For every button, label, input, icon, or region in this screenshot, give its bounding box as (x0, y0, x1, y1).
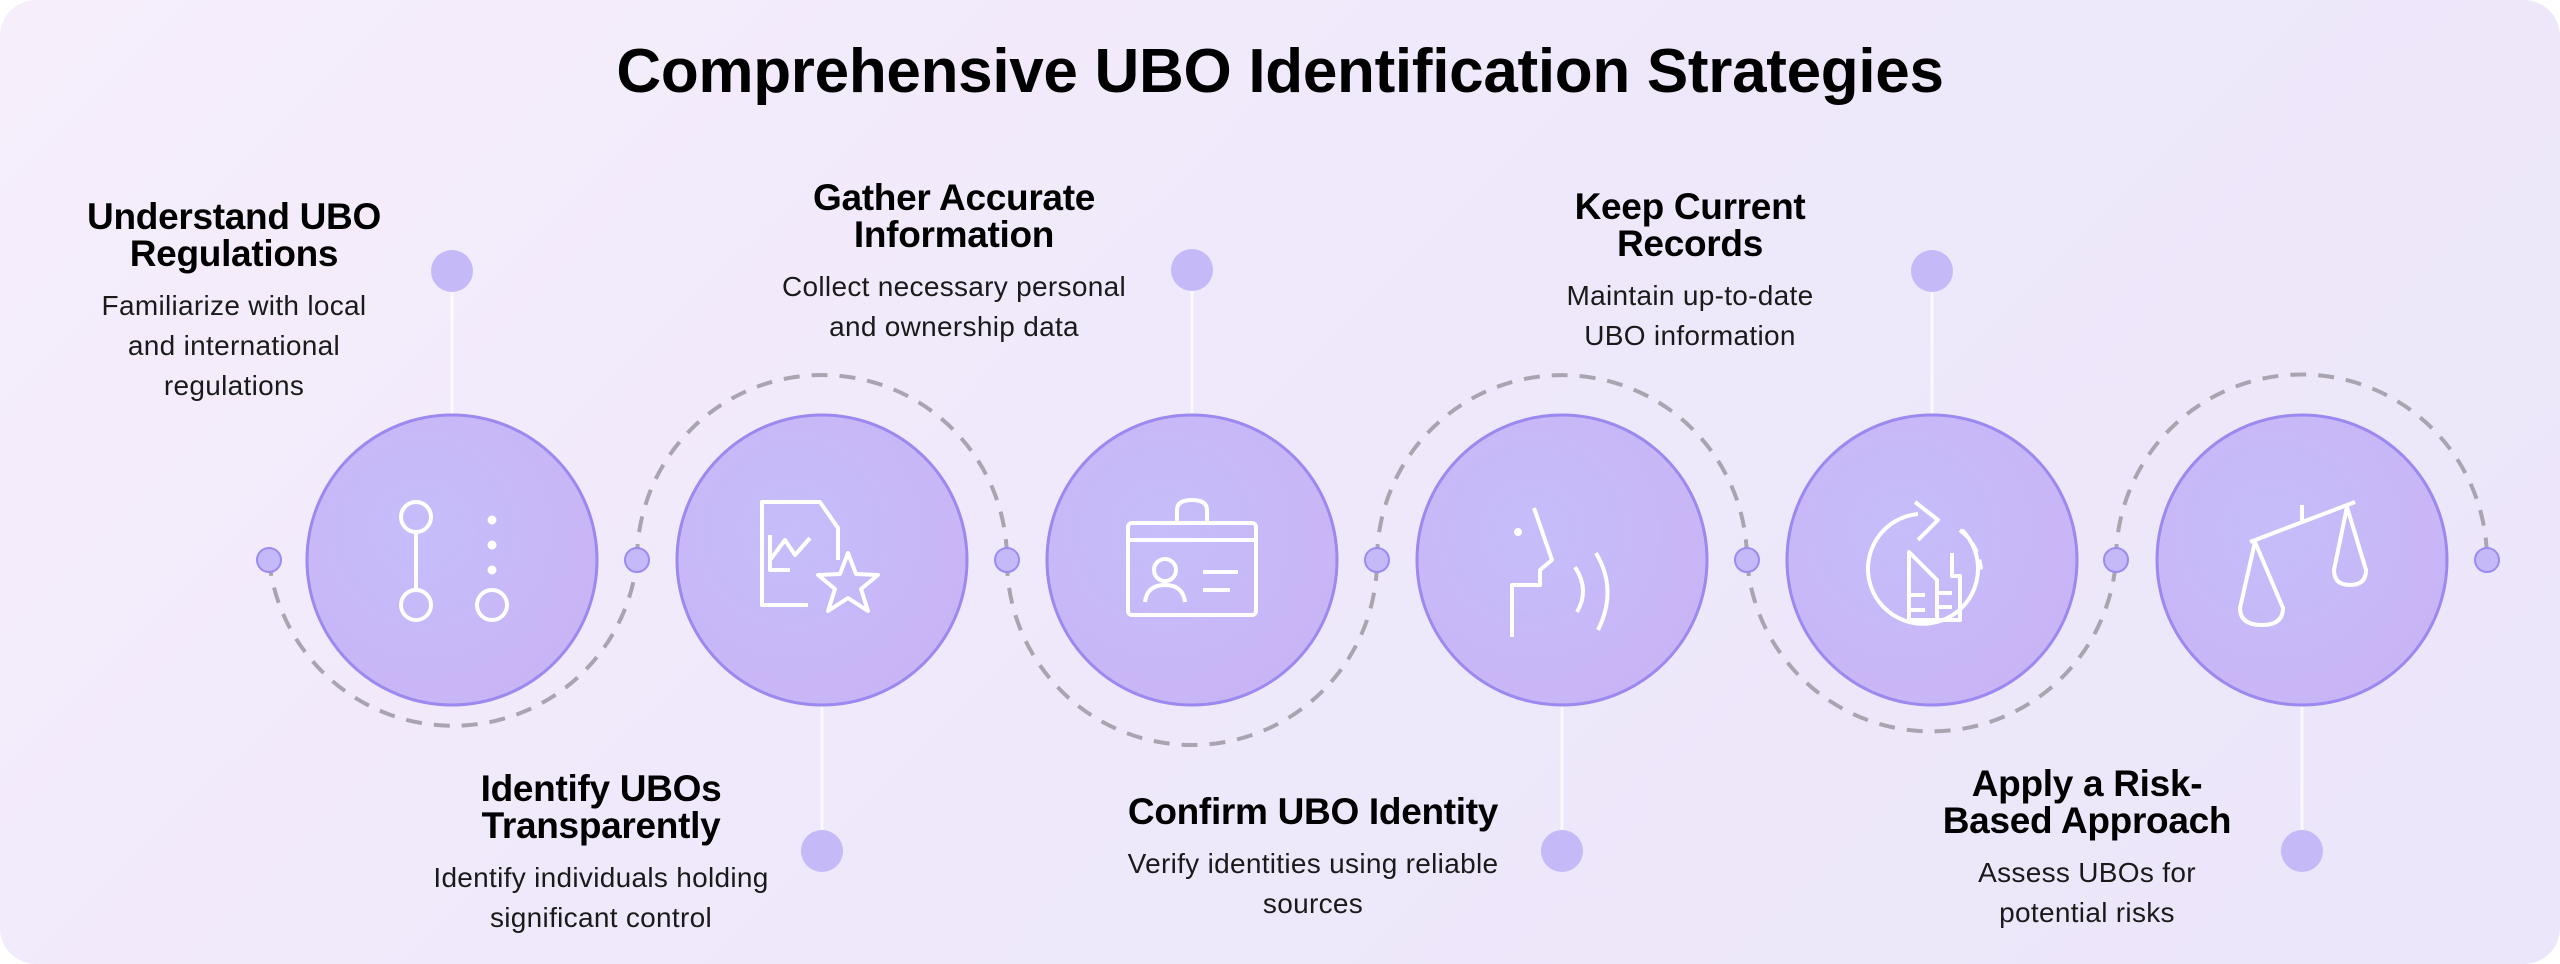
text: gather: and ownership data (829, 311, 1079, 342)
icon: refresh building (1868, 502, 1981, 624)
text: identify: Identify UBOs (481, 768, 721, 809)
icon: nodes (401, 502, 507, 620)
text: understand: Familiarize with local (102, 290, 366, 321)
text: identify: Identify individuals holding (433, 862, 769, 893)
text: keep: UBO information (1584, 320, 1796, 351)
text: identify: Transparently (482, 805, 720, 846)
icon: scale (2240, 502, 2366, 625)
text: keep (1567, 186, 1813, 351)
text: confirm: sources (1263, 888, 1363, 919)
text: gather: Information (854, 214, 1054, 255)
text: gather (782, 177, 1126, 342)
text: gather: Collect necessary personal (782, 271, 1126, 302)
title: Comprehensive UBO Identification Strategies (616, 37, 1944, 106)
icon: document star (762, 502, 878, 611)
text: understand (87, 196, 381, 401)
icon: speaking head (1512, 508, 1608, 637)
text: understand: Regulations (130, 233, 338, 274)
text: understand: Understand UBO (87, 196, 381, 237)
icon: id card (1128, 500, 1256, 615)
text: confirm: Verify identities using reliable (1128, 848, 1498, 879)
text: understand: and international (128, 330, 340, 361)
text: keep: Keep Current (1575, 186, 1805, 227)
text: keep: Maintain up-to-date (1567, 280, 1813, 311)
text: apply (1943, 763, 2231, 928)
text: confirm (1128, 791, 1498, 919)
text: confirm: Confirm UBO Identity (1128, 791, 1498, 832)
text: understand: regulations (164, 370, 304, 401)
text: apply: Based Approach (1943, 800, 2231, 841)
text: apply: Assess UBOs for (1978, 857, 2196, 888)
text: apply: potential risks (1999, 897, 2175, 928)
text: identify (433, 768, 769, 933)
text: apply: Apply a Risk- (1972, 763, 2202, 804)
text: keep: Records (1617, 223, 1763, 264)
text: gather: Gather Accurate (813, 177, 1095, 218)
text: identify: significant control (490, 902, 712, 933)
